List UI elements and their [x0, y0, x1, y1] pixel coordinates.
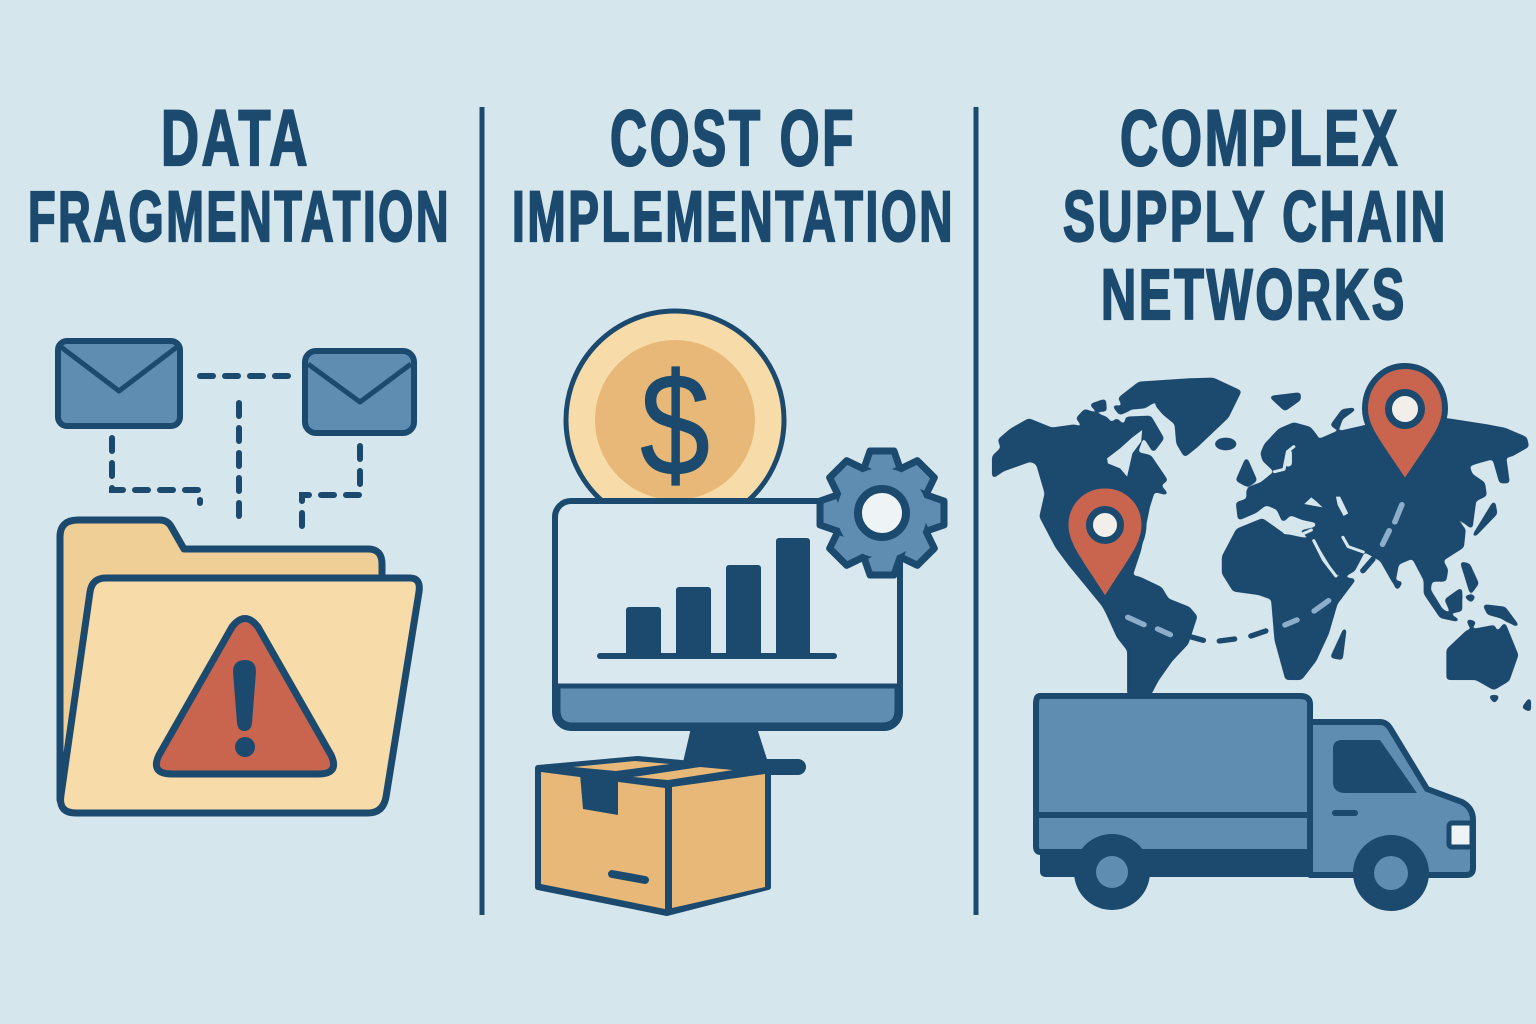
truck window — [1333, 740, 1417, 793]
icon: map pin americas — [1066, 486, 1144, 600]
greenland — [1120, 379, 1239, 455]
heading: cost of implementation — [512, 93, 955, 257]
new zealand — [1491, 697, 1529, 710]
truck wheels — [1074, 834, 1429, 911]
world map — [994, 379, 1529, 710]
eurasia — [1238, 417, 1527, 620]
inland seas and coasts — [1107, 430, 1363, 576]
heading: data fragmentation — [28, 93, 451, 257]
icon: left envelope — [58, 341, 180, 426]
land masses — [994, 379, 1529, 710]
heading: data fragmentation: FRAGMENTATION — [28, 178, 451, 257]
icon: delivery truck — [1036, 696, 1473, 911]
heading: data fragmentation: DATA — [161, 93, 310, 182]
icon: cardboard box — [538, 759, 768, 913]
heading: complex supply chain networks: NETWORKS — [1101, 256, 1407, 335]
iceland — [1217, 439, 1235, 449]
icon: dollar coin — [566, 311, 784, 529]
icon: dollar coin: $ — [640, 343, 710, 506]
icon: warning triangle — [156, 618, 334, 774]
heading: complex supply chain networks — [1063, 93, 1448, 335]
north america — [994, 411, 1166, 608]
icon: right envelope — [305, 351, 414, 433]
bar chart — [600, 538, 834, 657]
heading: cost of implementation: IMPLEMENTATION — [512, 178, 955, 257]
illustration: world map, pins and truck — [994, 366, 1529, 911]
illustration: cost coin, monitor, gear and box — [538, 311, 944, 913]
shipping route — [1128, 505, 1402, 641]
icon: monitor with bar chart — [555, 501, 900, 775]
uk — [1238, 460, 1255, 485]
south america — [1104, 577, 1196, 693]
africa — [1224, 520, 1353, 678]
icon: map pin asia — [1365, 366, 1445, 483]
madagascar — [1332, 630, 1345, 658]
icon: gear — [820, 451, 944, 575]
icon: folder — [60, 520, 419, 813]
heading: complex supply chain networks: COMPLEX — [1120, 93, 1400, 182]
heading: cost of implementation: COST OF — [610, 93, 856, 182]
illustration: scattered emails and folder — [58, 341, 419, 813]
truck headlight — [1449, 823, 1472, 847]
dashed connectors — [112, 376, 360, 535]
asian islands — [1395, 503, 1517, 627]
australia — [1448, 625, 1517, 688]
arctic islands — [1092, 394, 1353, 428]
